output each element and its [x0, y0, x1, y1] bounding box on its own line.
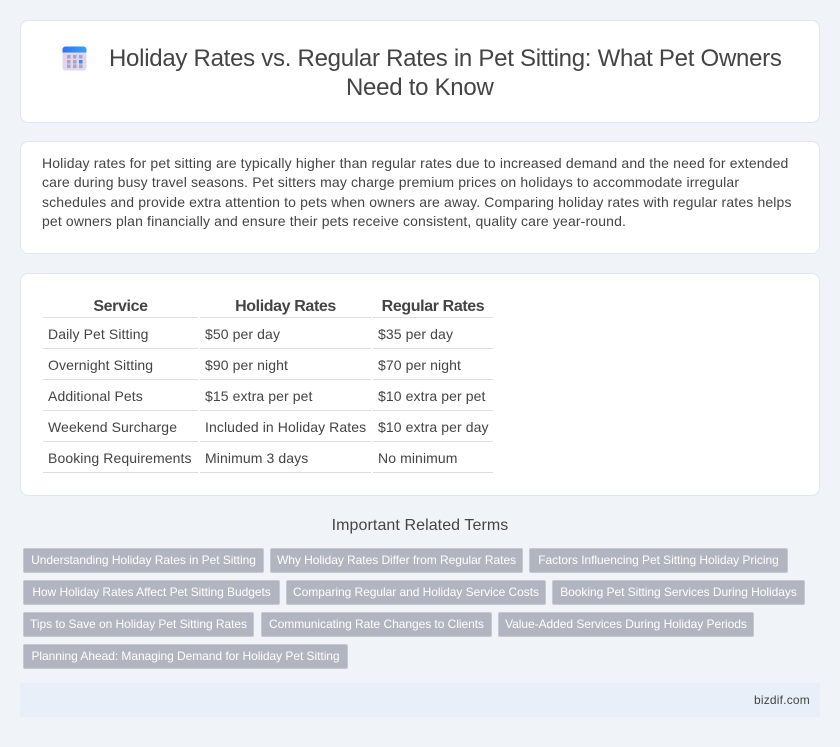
related terms heading: Important Related Terms [332, 517, 508, 534]
related terms tags: Booking Pet Sitting Services During Holidays [560, 585, 797, 599]
comparison table: $10 extra per pet [378, 388, 486, 404]
related terms tags: Value-Added Services During Holiday Periods [505, 617, 747, 631]
comparison table: Additional Pets [48, 388, 143, 404]
related terms tags: Understanding Holiday Rates in Pet Sitting [31, 553, 256, 567]
table panel [20, 273, 820, 496]
intro paragraph: Holiday rates for pet sitting are typically higher than regular rates due to increased demand and the need for extended [42, 155, 788, 171]
comparison table: $35 per day [378, 326, 453, 342]
comparison table: $90 per night [205, 357, 288, 373]
comparison table: $10 extra per day [378, 419, 489, 435]
footer bar [20, 683, 820, 717]
title line 2: Need to Know [346, 74, 494, 101]
related terms tags: Communicating Rate Changes to Clients [269, 617, 484, 631]
icon: calendar [62, 46, 86, 70]
comparison table: $70 per night [378, 357, 461, 373]
comparison table: Booking Requirements [48, 450, 192, 466]
intro panel [20, 141, 820, 254]
comparison table: Regular Rates [382, 298, 484, 315]
header panel [20, 20, 820, 123]
related terms tags: How Holiday Rates Affect Pet Sitting Budgets [32, 585, 271, 599]
comparison table: Weekend Surcharge [48, 419, 177, 435]
intro paragraph [42, 155, 792, 229]
comparison table [43, 298, 493, 473]
title: Holiday Rates vs. Regular Rates in Pet Sitting: What Pet Owners [109, 45, 782, 72]
related terms tags: Planning Ahead: Managing Demand for Holiday Pet Sitting [31, 649, 340, 663]
comparison table: $15 extra per pet [205, 388, 313, 404]
related terms tags [23, 548, 805, 669]
intro paragraph: pet owners plan financially and ensure their pets receive consistent, quality care year-round. [42, 213, 626, 229]
comparison table: Overnight Sitting [48, 357, 153, 373]
related terms tags: Tips to Save on Holiday Pet Sitting Rates [30, 617, 247, 631]
comparison table: $50 per day [205, 326, 280, 342]
comparison table: Minimum 3 days [205, 450, 308, 466]
comparison table: Service [93, 298, 148, 315]
related terms tags: Why Holiday Rates Differ from Regular Rates [277, 553, 516, 567]
related terms tags: Comparing Regular and Holiday Service Costs [293, 585, 539, 599]
footer source text: bizdif.com [754, 693, 810, 707]
intro paragraph: schedules and provide extra attention to pets when owners are away. Comparing holiday rates with regular rates helps [42, 194, 792, 210]
comparison table: No minimum [378, 450, 458, 466]
related terms tags: Factors Influencing Pet Sitting Holiday Pricing [538, 553, 779, 567]
comparison table: Daily Pet Sitting [48, 326, 149, 342]
comparison table: Included in Holiday Rates [205, 419, 366, 435]
comparison table: Holiday Rates [235, 298, 336, 315]
intro paragraph: care during busy travel seasons. Pet sitters may charge premium prices on holidays to accommodate irregular [42, 174, 739, 190]
